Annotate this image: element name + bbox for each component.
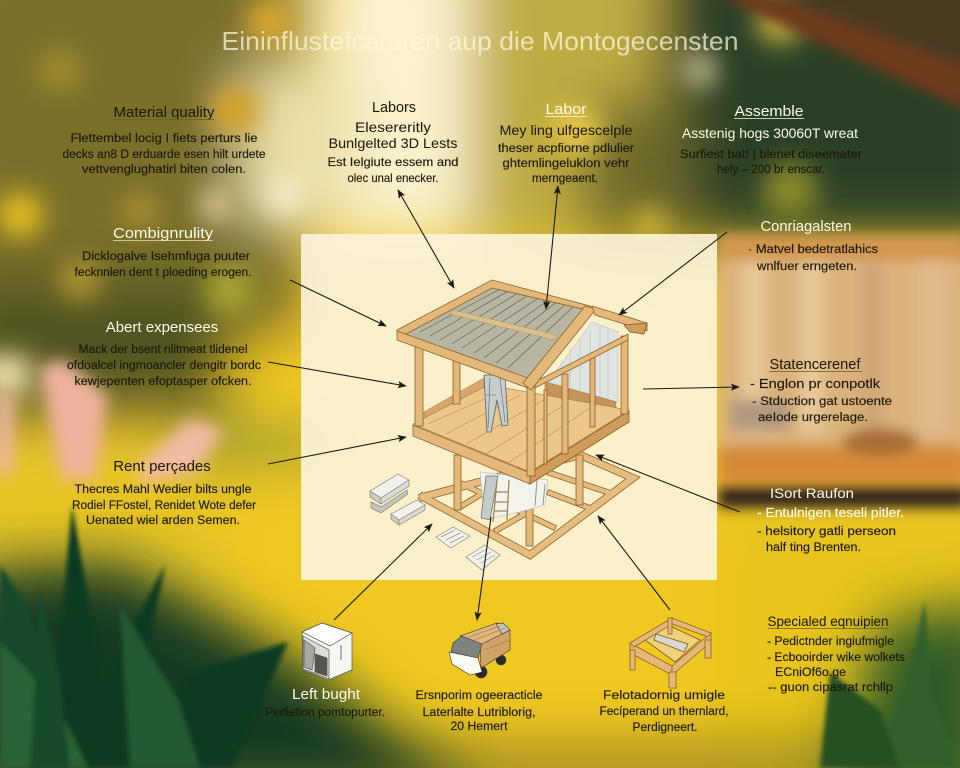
panel: material quality bbox=[62, 104, 266, 176]
icon: wooden frame bbox=[630, 618, 711, 688]
panel: short ration: ISort Raufon bbox=[770, 485, 854, 501]
upper back wall and floor bbox=[413, 322, 629, 472]
panel: labor: merngeaent. bbox=[532, 173, 598, 185]
panel: specialized equipment: -- guon cipasrat rchllp bbox=[768, 682, 893, 694]
central panel bbox=[301, 234, 717, 580]
panel: rent: Thecres Mahl Wedier bilts ungle bbox=[74, 484, 252, 496]
panel: specialized equipment: - Pedictnder ingiufmigle bbox=[767, 636, 894, 648]
panel: labor: Labor bbox=[546, 101, 586, 118]
panel: short ration: - Entulnigen teseli pitler. bbox=[757, 505, 904, 520]
panel: contingency bbox=[748, 218, 878, 273]
panel: labor bbox=[498, 101, 634, 185]
panel: labors: Est Ielgiute essem and bbox=[328, 155, 458, 169]
panel: compatibility bbox=[74, 225, 252, 279]
construction materials bbox=[370, 474, 500, 570]
panel: staging: Statencerenef bbox=[770, 356, 861, 373]
panel: material quality: decks an8 D erduarde esen hilt urdete bbox=[62, 149, 266, 161]
panel: rent bbox=[72, 458, 256, 527]
icon: delivery truck bbox=[449, 623, 510, 678]
panel: assemble: Surfiest bat! | blenet diseemater bbox=[680, 149, 862, 161]
title: Eininflustefcaturen aup die Montogecensten bbox=[222, 26, 738, 56]
panel: labor: ghtemlingeluklon vehr bbox=[502, 158, 630, 170]
lower frame bbox=[423, 455, 633, 555]
caption: truck bbox=[416, 690, 542, 733]
panel: labors: olec unal enecker. bbox=[348, 171, 438, 185]
panel: specialized equipment: Specialed eqnuipien bbox=[768, 613, 888, 629]
panel: labor: theser acpfiorne pdlulier bbox=[498, 143, 634, 155]
panel: assemble: Assemble bbox=[734, 103, 804, 120]
panel: labors: Bunlgelted 3D Lests bbox=[328, 135, 458, 151]
caption: truck: Ersnporim ogeeracticle bbox=[416, 690, 542, 702]
panel: assemble: hely – 200 br enscar. bbox=[717, 164, 825, 176]
caption: frame: Fecíperand un thernlard, bbox=[600, 706, 728, 718]
arrows bbox=[268, 186, 740, 620]
posts bbox=[415, 334, 628, 476]
panel: expenses: kewjepenten efoptasper ofcken. bbox=[74, 376, 252, 388]
panel: compatibility: Dicklogalve Isehmfuga puuter bbox=[82, 251, 250, 263]
background: shed and roof bbox=[715, 0, 960, 508]
panel: expenses: Abert expensees bbox=[106, 319, 218, 336]
panel: contingency: wnlfuer erngeten. bbox=[756, 261, 857, 273]
panel: contingency: · Matvel bedetratlahics bbox=[748, 244, 878, 256]
background: pink flowers bbox=[0, 358, 225, 482]
caption: box: Left bught bbox=[292, 686, 361, 703]
panel: compatibility: Combignrulity bbox=[113, 225, 214, 242]
platform bbox=[413, 411, 629, 484]
panel: labors bbox=[328, 99, 458, 185]
panel: labor: Mey ling ulfgescelple bbox=[500, 123, 632, 138]
panel: contingency: Conriagalsten bbox=[760, 218, 852, 235]
caption: frame bbox=[600, 690, 728, 734]
icon: insulated box bbox=[302, 623, 352, 680]
caption: truck: 20 Hemert bbox=[450, 721, 508, 733]
panel: staging: - Stduction gat ustoente bbox=[752, 396, 892, 408]
caption: frame: Perdigneert. bbox=[632, 722, 698, 734]
caption: box: Pedietion pomtopurter. bbox=[265, 707, 385, 719]
caption: truck: Laterlalte Lutriblorig, bbox=[422, 707, 536, 719]
panel: labors: Elesereritly bbox=[355, 119, 431, 135]
panel: expenses: Mack der bsent nlitmeat tlidenel bbox=[78, 344, 248, 356]
caption: box bbox=[265, 686, 385, 719]
panel: specialized equipment bbox=[767, 613, 905, 694]
panel: rent: Uenated wiel arden Semen. bbox=[86, 515, 240, 527]
panel: specialized equipment: - Ecbooirder wike wolkets bbox=[767, 652, 905, 664]
panel: staging: - Englon pr conpotlk bbox=[750, 376, 881, 391]
panel: short ration bbox=[757, 485, 904, 554]
figure with ladder under the floor bbox=[480, 472, 548, 522]
panel: expenses bbox=[67, 319, 261, 388]
panel: material quality: vettvenglughatirl biten colen. bbox=[82, 164, 246, 176]
panel: material quality: Flettembel locig I fiets perturs lie bbox=[70, 133, 258, 145]
caption: frame: Felotadornig umigle bbox=[603, 690, 725, 702]
panel: compatibility: fecknnlen dent t ploeding erogen. bbox=[74, 267, 252, 279]
illustration: timber structure bbox=[370, 280, 647, 570]
panel: rent: Rent perçades bbox=[113, 458, 211, 475]
panel: expenses: ofdoalcel ingmoancler dengitr bordc bbox=[67, 360, 261, 372]
panel: specialized equipment: ECniOf6o.ge bbox=[775, 667, 846, 679]
standing figure bbox=[484, 375, 508, 432]
panel: staging bbox=[750, 356, 892, 424]
panel: labors: Labors bbox=[372, 99, 416, 116]
panel: assemble bbox=[680, 103, 862, 176]
panel: assemble: Asstenig hogs 30060T wreat bbox=[682, 125, 858, 141]
roof bbox=[397, 280, 647, 390]
panel: material quality: Material quality bbox=[114, 104, 215, 121]
panel: short ration: - helsitory gatli perseon bbox=[757, 526, 896, 538]
panel: short ration: half ting Brenten. bbox=[766, 542, 861, 554]
background: plants bbox=[0, 560, 960, 768]
panel: rent: Rodiel FFostel, Renidet Wote defer bbox=[72, 500, 256, 512]
panel: staging: aeIode urgerelage. bbox=[758, 412, 868, 424]
